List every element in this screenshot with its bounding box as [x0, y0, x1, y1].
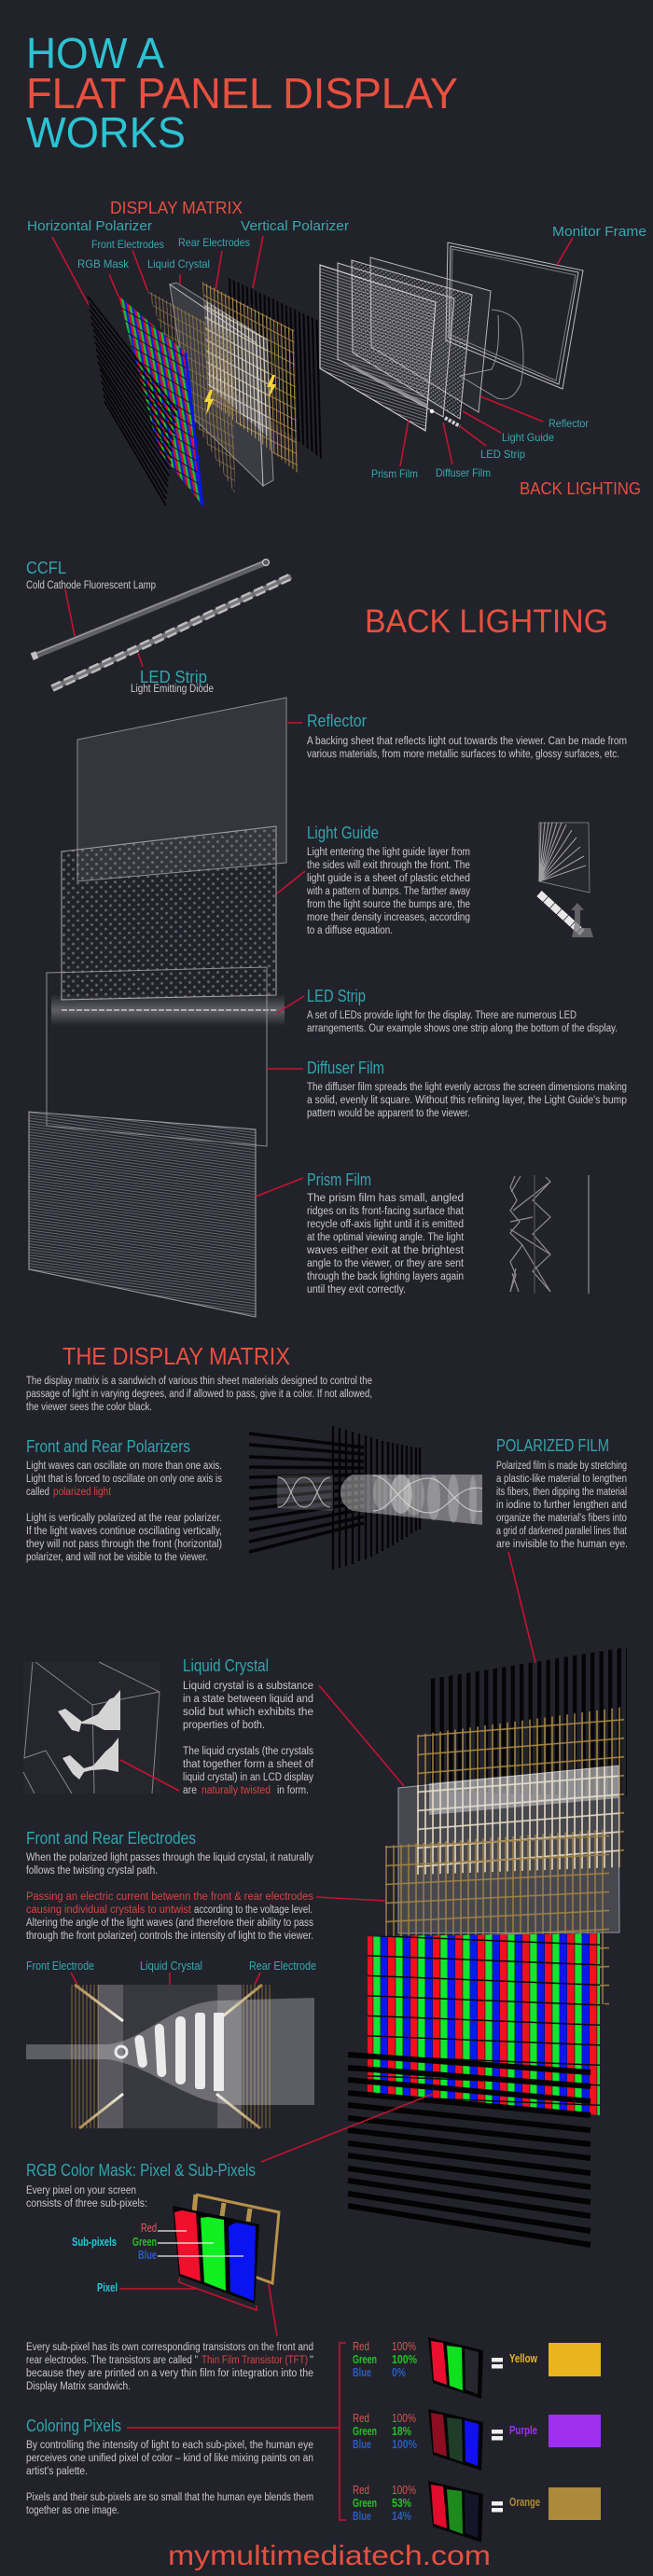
icon: light guide detail: [539, 823, 593, 937]
text: front and rear polarizers: polarizer, and will not be visible to the viewer.: [26, 1552, 208, 1563]
text: coloring pixels: artist's palette.: [26, 2466, 88, 2477]
waves: [278, 1475, 482, 1513]
rear electrode: [417, 1707, 624, 1875]
liquid crystal layer: [398, 1766, 619, 1933]
reflector sheet face: [77, 698, 286, 881]
text: display matrix intro: [26, 1376, 372, 1413]
panel: back lighting layers: [29, 698, 305, 1317]
color row: orange: Blue: [353, 2510, 371, 2523]
color row: purple: Purple: [509, 2424, 537, 2437]
text: transistors: rear electrodes. The transistors are called ": [26, 2355, 198, 2366]
diagram: light through polarizers: [249, 1426, 482, 1570]
section heading: back lighting: BACK LIGHTING: [365, 603, 608, 640]
leader lines: [256, 723, 305, 1197]
text: polarized film: [496, 1436, 628, 1550]
reflector sheet: [370, 257, 491, 412]
leader lines: [52, 236, 573, 466]
section heading: the display matrix: THE DISPLAY MATRIX: [63, 1342, 290, 1370]
text: light guide: [306, 824, 470, 936]
color row: purple: 18%: [392, 2425, 411, 2438]
sub-pixel labels: Pixel: [97, 2281, 118, 2294]
LED strip: [352, 367, 460, 426]
text: liquid crystal: naturally twisted: [201, 1785, 271, 1796]
heading: back lighting small: BACK LIGHTING: [520, 479, 641, 498]
title: FLAT PANEL DISPLAY: [26, 69, 458, 118]
text: display matrix intro: passage of light in varying degrees, and if allowed to pass, give it a color. If not allowed,: [26, 1389, 372, 1400]
text: light guide: to a diffuse equation.: [307, 925, 393, 936]
LED subtitle: Light Emitting Diode: [131, 684, 214, 695]
color row: orange: 14%: [392, 2510, 411, 2523]
text: liquid crystal: properties of both.: [183, 1720, 265, 1731]
panel: lamp types: [26, 559, 291, 695]
exploded diagram: back lighting: [320, 242, 583, 431]
part labels: Prism Film: [371, 467, 418, 480]
front electrode: [385, 1829, 609, 2005]
icon: lightning bolt right: [267, 375, 276, 398]
text: light guide: Light entering the light guide layer from: [307, 847, 470, 858]
color row: orange: Orange: [509, 2496, 540, 2509]
part labels: RGB Mask: [77, 257, 130, 270]
text: display matrix intro: the viewer sees the color black.: [26, 1402, 152, 1413]
layer: horizontal polarizer slats: [88, 297, 177, 506]
part labels: Vertical Polarizer: [241, 218, 349, 234]
leader lines: [65, 589, 143, 667]
text: front and rear electrodes: When the polarized light passes through the liquid crystal, it naturally: [26, 1852, 313, 1863]
text: front and rear polarizers: Front and Rear Polarizers: [26, 1437, 190, 1456]
electrode wires right: [243, 1985, 272, 2128]
color row: purple: 100%: [392, 2438, 417, 2451]
title: WORKS: [26, 108, 186, 157]
exploded diagram: display matrix: [88, 278, 324, 506]
electrode frame: [194, 2195, 279, 2283]
text: prism film: angle to the viewer, or they are sent: [307, 1258, 465, 1269]
electrode arms: [69, 1985, 272, 2128]
color row: orange: 100%: [392, 2484, 416, 2497]
crystal cell: [98, 1985, 242, 2128]
color row: yellow: Green: [353, 2353, 377, 2366]
text: coloring pixels: together as one image.: [26, 2505, 119, 2516]
text: coloring pixels: perceives one unified pixel of color – kind of like mixing paints on an: [26, 2453, 313, 2464]
red sub-pixel: [174, 2210, 201, 2281]
title: [26, 29, 458, 157]
text: diffuser film: Diffuser Film: [307, 1059, 384, 1077]
sub-pixel labels: [72, 2222, 157, 2294]
icon: lightning bolt left: [204, 390, 214, 415]
light guide sheet: [352, 260, 472, 419]
prism film: [29, 1112, 256, 1317]
text: front and rear electrodes: according to the voltage level.: [194, 1904, 313, 1916]
text: front and rear electrodes: causing individual crystals to untwist: [26, 1904, 192, 1916]
leader lines: [71, 1973, 260, 1985]
color row: yellow: [353, 2337, 601, 2399]
part labels: Light Guide: [502, 431, 554, 444]
leader lines: [261, 1552, 535, 2162]
text: liquid crystal: Liquid crystal is a substance: [183, 1681, 313, 1692]
rear light beam: [277, 1475, 333, 1511]
electrode wires: [69, 1985, 99, 2128]
text: diffuser film: a solid, evenly lit square. Without this refining layer, the Light Guide's bump: [307, 1095, 627, 1106]
sub-pixel labels: Green: [132, 2236, 157, 2249]
diffuser film: [47, 967, 267, 1146]
text: liquid crystal: The liquid crystals (the crystals: [183, 1746, 313, 1757]
part labels: Liquid Crystal: [147, 257, 210, 270]
text: front and rear electrodes: follows the twisting crystal path.: [26, 1865, 158, 1877]
black sheet: [173, 2206, 259, 2304]
text: polarized film: POLARIZED FILM: [496, 1436, 609, 1455]
text: display matrix intro: The display matrix is a sandwich of various thin sheet materials designed to control the: [26, 1376, 372, 1387]
heading: RGB color mask: RGB Color Mask: Pixel & Sub-Pixels: [26, 2161, 256, 2180]
LED strip glow: [51, 994, 285, 1026]
pixel bracket: [119, 2278, 277, 2336]
text: LED strip: A set of LEDs provide light for the display. There are numerous LED: [307, 1010, 577, 1021]
text: front and rear polarizers: Light that is forced to oscillate on only one axis is: [26, 1474, 222, 1485]
color row: yellow: Red: [353, 2340, 369, 2353]
layer: RGB mask: [118, 296, 202, 506]
text: liquid crystal: solid but which exhibits the: [183, 1707, 313, 1718]
text: front and rear polarizers: polarized light: [53, 1487, 112, 1498]
LED strip: [52, 576, 291, 688]
part labels: Horizontal Polarizer: [27, 218, 152, 234]
text: every pixel: consists of three sub-pixels:: [26, 2198, 147, 2209]
diagram labels: Rear Electrode: [249, 1959, 316, 1973]
part labels: Monitor Frame: [552, 224, 646, 240]
diffuser sheet: [338, 263, 454, 417]
labels and leader lines: diagram: [27, 199, 646, 498]
text: coloring pixels: Pixels and their sub-pixels are so small that the human eye blends them: [26, 2492, 313, 2503]
color row: yellow: 0%: [392, 2366, 406, 2379]
text: front and rear polarizers: Light waves can oscillate on more than one axis.: [26, 1461, 222, 1472]
text: front and rear electrodes: through the front polarizer) controls the intensity of light to the viewer.: [26, 1931, 313, 1942]
text: liquid crystal: Liquid Crystal: [183, 1656, 269, 1675]
light path: [26, 1998, 314, 2105]
text: LED strip: LED Strip: [307, 987, 366, 1005]
monitor stand: [460, 310, 523, 399]
color row: orange: Green: [353, 2497, 377, 2510]
text: liquid crystal: in a state between liquid and: [183, 1694, 313, 1705]
text: front and rear polarizers: If the light waves continue oscillating vertically,: [26, 1526, 222, 1537]
twisted crystals: [116, 2013, 224, 2091]
title: HOW A: [26, 29, 164, 77]
text: light guide: with a pattern of bumps. The farther away: [306, 886, 470, 897]
part labels: LED Strip: [480, 448, 525, 461]
prism sheet: [320, 265, 436, 431]
text: front and rear polarizers: Light is vertically polarized at the rear polarizer.: [26, 1513, 222, 1524]
text: LED strip: [307, 987, 618, 1034]
rear polarizer: [431, 1647, 627, 1797]
text: liquid crystal: [183, 1656, 314, 1796]
color row: purple: [353, 2409, 601, 2471]
text: every pixel: [26, 2185, 147, 2209]
text: front and rear electrodes: Front and Rear Electrodes: [26, 1829, 196, 1848]
color row: yellow: Blue: [353, 2366, 371, 2379]
text: transistors: [26, 2342, 313, 2392]
text: front and rear polarizers: they will not pass through the front (horizontal): [26, 1539, 222, 1550]
vertical slats: [333, 1426, 420, 1570]
front polarizer: [348, 2055, 590, 2245]
diagram labels: Liquid Crystal: [140, 1959, 202, 1973]
text: diffuser film: pattern would be apparent to the viewer.: [307, 1108, 470, 1119]
sub-pixel labels: Sub-pixels: [72, 2236, 117, 2249]
text: diffuser film: [307, 1059, 627, 1119]
diagram labels: Front Electrode: [26, 1959, 94, 1973]
color row: yellow: 100%: [392, 2353, 417, 2366]
text: transistors: Display Matrix sandwich.: [26, 2381, 131, 2392]
CCFL tube: [31, 560, 269, 660]
green sub-pixel: [201, 2217, 226, 2291]
color row: orange: [353, 2481, 601, 2542]
monitor frame: [446, 242, 583, 389]
text: front and rear electrodes: Altering the angle of the light waves (and therefore their ability to pass: [26, 1918, 313, 1929]
horizontal slats: [249, 1433, 364, 1552]
icon: liquid crystal box: [23, 1662, 179, 1794]
diagram: pixel and sub-pixels: [72, 2195, 279, 2336]
text: transistors: Every sub-pixel has its own corresponding transistors on the front and: [26, 2342, 313, 2353]
layer: rear electrodes: [202, 282, 298, 473]
text: reflector: [307, 712, 627, 760]
layer: vertical polarizer: [229, 278, 324, 461]
text: coloring pixels: [26, 2417, 313, 2516]
text: front and rear electrodes: [26, 1829, 313, 1942]
text: light guide: the sides will exit through the front. The: [307, 860, 470, 871]
text: liquid crystal: are: [183, 1785, 197, 1796]
part labels: Front Electrodes: [91, 238, 164, 251]
text: prism film: Prism Film: [307, 1170, 371, 1189]
color row: purple: Green: [353, 2425, 377, 2438]
text: liquid crystal: in form.: [277, 1785, 309, 1796]
part labels: Diffuser Film: [436, 466, 491, 479]
part labels: Rear Electrodes: [178, 236, 250, 249]
layer: liquid crystal box: [170, 283, 273, 486]
connector and bracket: [127, 2343, 346, 2520]
diagram: electrodes and twisted crystal: [26, 1959, 316, 2128]
LED strip line: [62, 1009, 276, 1011]
text: prism film: [306, 1170, 465, 1295]
text: polarized film: in iodine to further lengthen and: [496, 1500, 627, 1511]
text: coloring pixels: By controlling the intensity of light to each sub-pixel, the human eye: [26, 2440, 313, 2451]
part labels: [27, 218, 646, 480]
color row: purple: Red: [353, 2412, 369, 2425]
text: transistors: ": [310, 2355, 313, 2366]
RGB mask: [368, 1933, 600, 2115]
text: polarized film: are invisible to the human eye.: [496, 1539, 628, 1550]
text: light guide: from the light source the bumps are, the: [307, 899, 470, 910]
text: front and rear polarizers: called: [26, 1487, 49, 1498]
text: transistors: Thin Film Transistor (TFT): [201, 2355, 308, 2366]
text: liquid crystal: liquid crystal) in an LCD display: [183, 1772, 313, 1783]
text: front and rear polarizers: [26, 1437, 222, 1563]
light guide sheet: [62, 826, 276, 1000]
text: front and rear electrodes: Passing an electric current betwenn the front & rear electrodes: [26, 1891, 313, 1903]
text: light guide: more their density increases, according: [307, 912, 470, 923]
diagram: display matrix sandwich: [261, 1552, 627, 2245]
text: transistors: because they are printed on a very thin film for integration into the: [26, 2368, 313, 2379]
front light beam: [340, 1475, 482, 1525]
text: light guide: Light Guide: [307, 824, 379, 842]
text: polarized film: organize the material's fibers into: [496, 1513, 627, 1524]
text: prism film: until they exit correctly.: [307, 1284, 406, 1295]
text: every pixel: Every pixel on your screen: [26, 2185, 136, 2196]
sub-pixel labels: Blue: [138, 2249, 157, 2262]
text: prism film: The prism film has small, angled: [307, 1193, 464, 1204]
LED heading: LED Strip: [140, 668, 207, 686]
color row: purple: Blue: [353, 2438, 371, 2451]
color row: yellow: 100%: [392, 2340, 416, 2353]
sub-pixel labels: Red: [141, 2222, 157, 2235]
text: prism film: at the optimal viewing angle. The light: [307, 1232, 465, 1243]
color row: orange: Red: [353, 2484, 369, 2497]
text: light guide: light guide is a sheet of plastic etched: [307, 873, 470, 884]
layer: front electrodes: [147, 290, 235, 494]
color row: yellow: Yellow: [509, 2352, 537, 2365]
CCFL subtitle: Cold Cathode Fluorescent Lamp: [26, 580, 156, 591]
diagram labels: [26, 1959, 316, 1973]
color row: purple: 100%: [392, 2412, 416, 2425]
text: prism film: through the back lighting layers again: [307, 1271, 464, 1282]
color row: orange: 53%: [392, 2497, 411, 2510]
pointer lines: [158, 2231, 243, 2256]
text: polarized film: a plastic-like material to lengthen: [496, 1474, 627, 1485]
icon: prism ridges: [510, 1175, 589, 1294]
blue sub-pixel: [229, 2223, 256, 2301]
CCFL heading: CCFL: [26, 559, 66, 577]
heading: display matrix: DISPLAY MATRIX: [110, 199, 243, 217]
text: coloring pixels: Coloring Pixels: [26, 2417, 121, 2435]
text: reflector: Reflector: [307, 712, 367, 730]
text: liquid crystal: that together form a sheet of: [183, 1759, 314, 1770]
text: prism film: recycle off-axis light until it is emitted: [307, 1219, 464, 1230]
text: prism film: ridges on its front-facing surface that: [307, 1206, 465, 1217]
text: prism film: waves either exit at the brightest: [306, 1245, 465, 1256]
footer url: mymultimediatech.com: [168, 2541, 491, 2571]
part labels: Reflector: [549, 417, 589, 430]
